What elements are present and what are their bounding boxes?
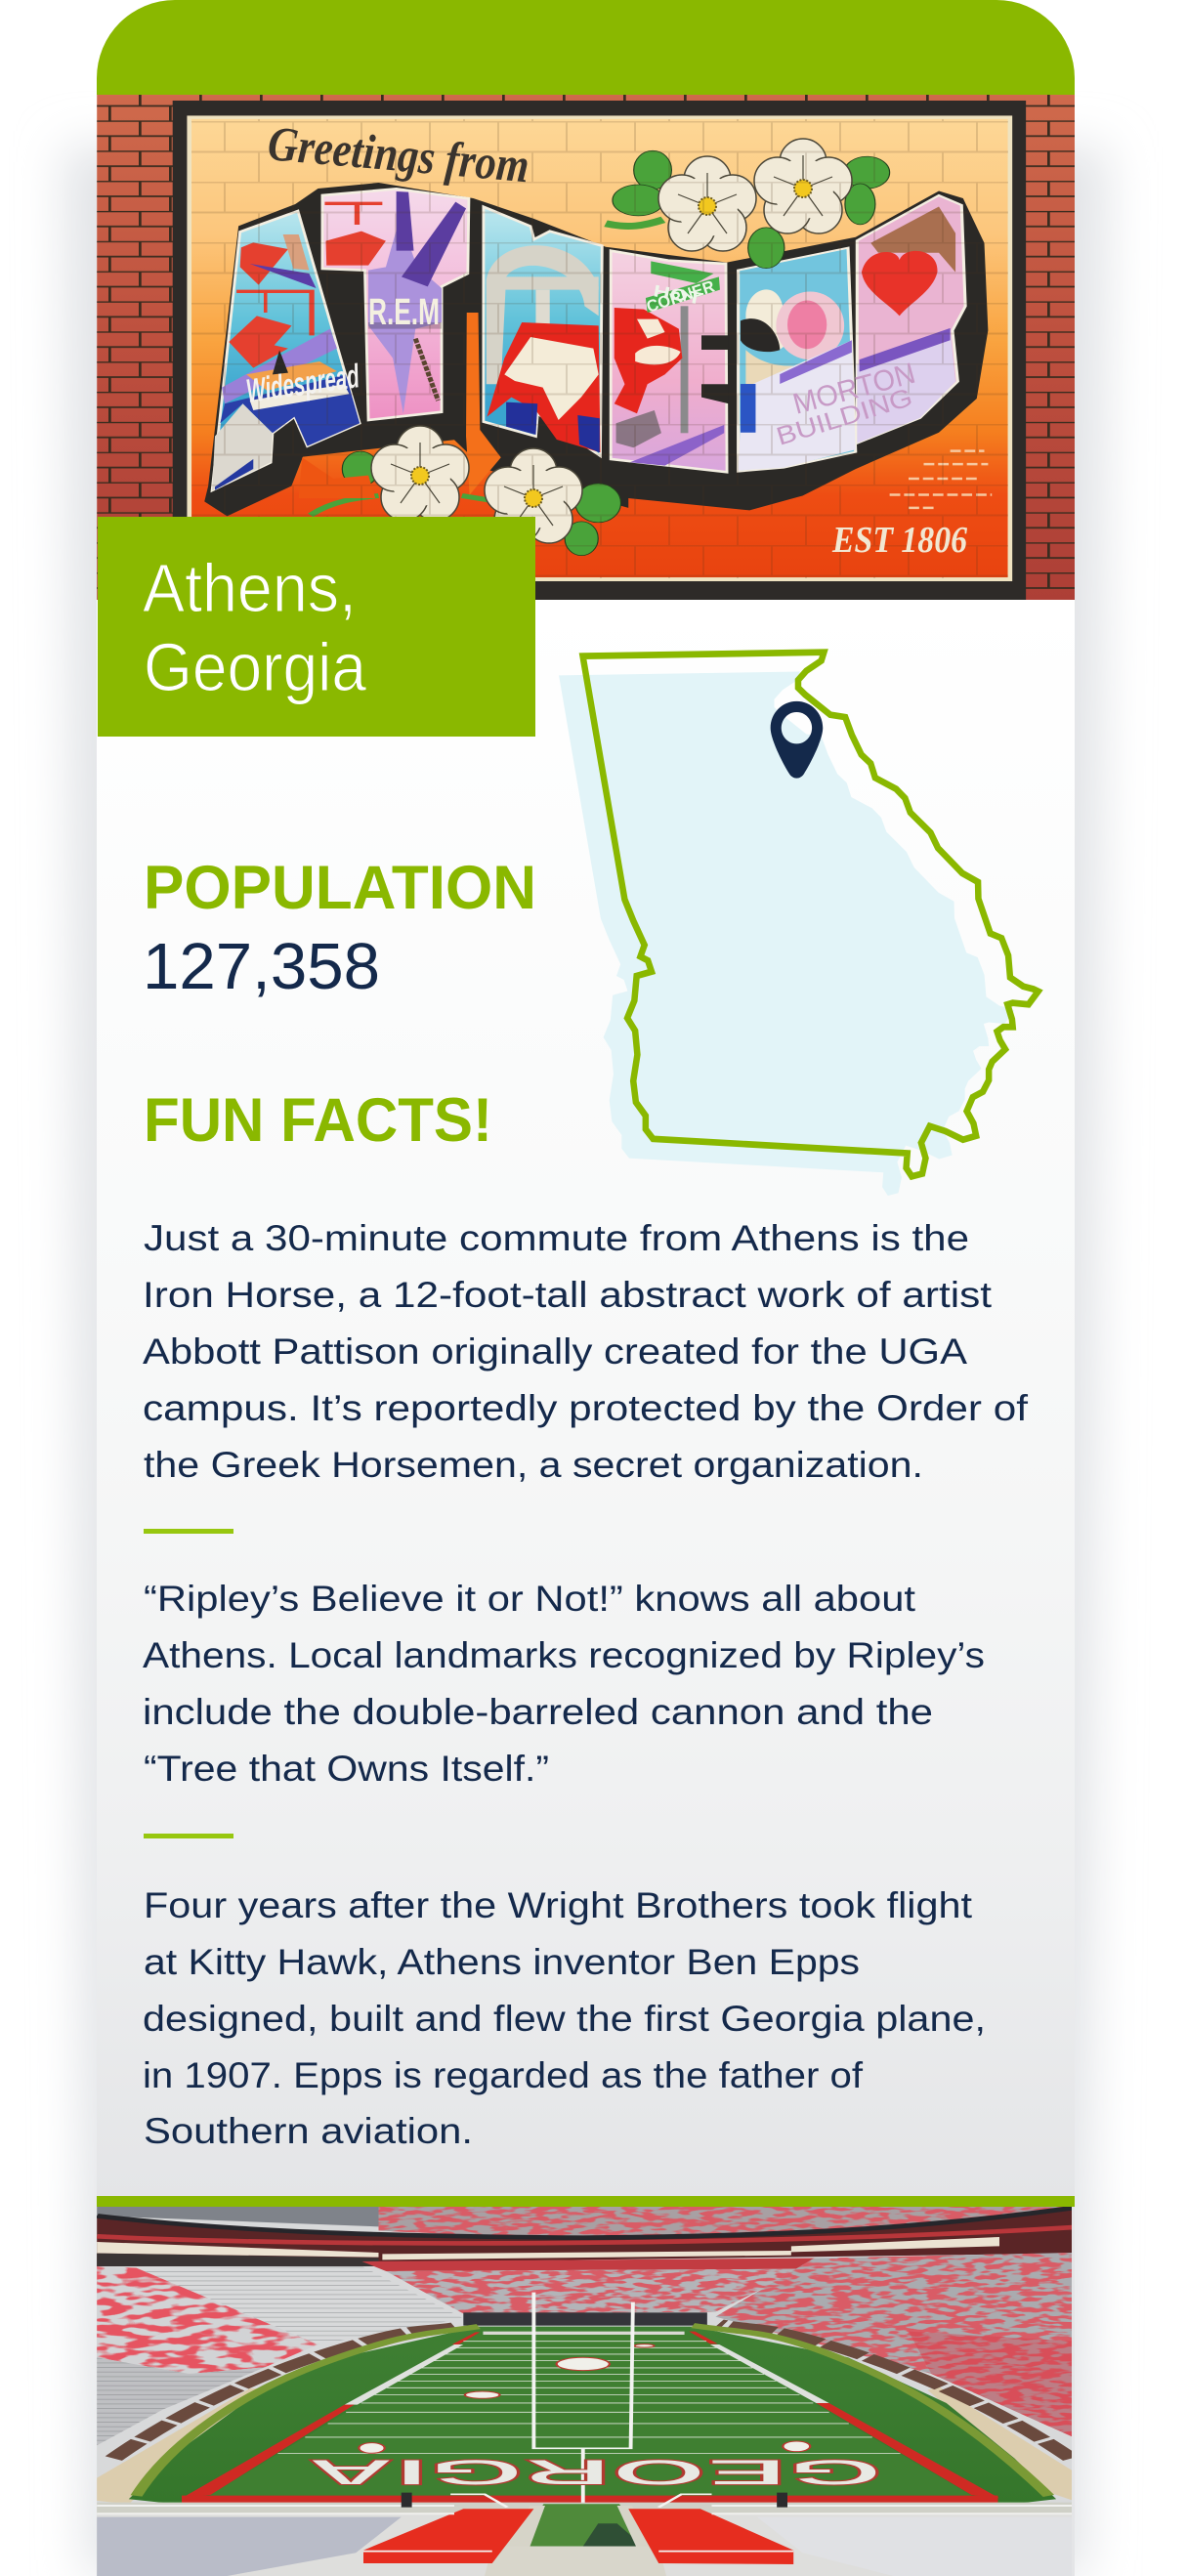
letter H bbox=[484, 207, 602, 456]
mural lettering: Widespread bbox=[244, 358, 362, 410]
midfield logos bbox=[359, 2344, 810, 2453]
red seats bbox=[363, 2509, 533, 2563]
orange gaps bbox=[466, 313, 501, 495]
lower bowl bbox=[97, 2504, 1074, 2576]
upper deck bbox=[97, 2207, 394, 2227]
fact: Ben Epps: at Kitty Hawk, Athens inventor Ben Epps bbox=[144, 1942, 860, 1982]
hedges bbox=[137, 2327, 479, 2496]
stadium artwork bbox=[97, 2207, 1075, 2576]
fact: Ripley's: “Tree that Owns Itself.” bbox=[144, 1749, 549, 1789]
letter S bbox=[857, 195, 965, 443]
card background bbox=[97, 95, 1075, 2576]
fact: Iron Horse bbox=[143, 1218, 1029, 1485]
fact: Ben Epps: designed, built and flew the first Georgia plane, bbox=[143, 1999, 986, 2039]
fact: Ripley's: “Ripley’s Believe it or Not!” knows all about bbox=[144, 1579, 916, 1619]
centre tunnel bbox=[515, 2504, 651, 2547]
railings bbox=[97, 2506, 1074, 2513]
fact: Iron Horse: Abbott Pattison originally created for the UGA bbox=[143, 1331, 967, 1372]
mural lettering: CORNER bbox=[644, 276, 717, 317]
letter A bbox=[212, 211, 360, 490]
fact: Ripley's: Athens. Local landmarks recognized by Ripley’s bbox=[143, 1635, 985, 1675]
mural wall and right-hand letters bbox=[97, 95, 1075, 600]
letter shadow bbox=[204, 183, 988, 516]
title text: Georgia bbox=[144, 629, 366, 705]
sideline bands bbox=[345, 2344, 463, 2405]
mural lettering: Greetings from bbox=[266, 115, 531, 192]
photo: Athens mural bbox=[97, 95, 1075, 600]
yard lines bbox=[277, 2342, 900, 2454]
field bbox=[208, 2333, 973, 2496]
fact: Ben Epps: in 1907. Epps is regarded as the father of bbox=[143, 2055, 864, 2095]
map outline bbox=[583, 653, 1039, 1176]
population figure: 127,358 bbox=[143, 930, 380, 1003]
letters A T H E bbox=[212, 189, 729, 498]
heading: fun facts: FUN FACTS! bbox=[144, 1086, 492, 1155]
mural flowers bbox=[371, 139, 852, 543]
signature scribbles bbox=[890, 451, 992, 508]
mural lettering: EST 1806 bbox=[831, 520, 967, 561]
right stands bbox=[715, 2253, 1074, 2437]
letter N bbox=[739, 248, 856, 472]
painted end-zone wordmark: GEORGIA bbox=[307, 2452, 882, 2492]
icon: location pin bbox=[771, 701, 823, 779]
mortar overlay bbox=[191, 119, 1008, 578]
goalpost bbox=[533, 2293, 633, 2504]
end-zone lettering bbox=[483, 2332, 685, 2335]
walkways bbox=[97, 2388, 261, 2504]
left stands bbox=[97, 2266, 361, 2267]
fact: Ben Epps: Southern aviation. bbox=[144, 2111, 473, 2151]
green header bar bbox=[97, 0, 1075, 95]
fact: Ben Epps: Four years after the Wright Brothers took flight bbox=[144, 1885, 973, 1925]
letter E bbox=[611, 251, 729, 472]
fact: Ben Epps bbox=[143, 1885, 986, 2151]
fact: Ripley's: include the double-barreled cannon and the bbox=[143, 1692, 933, 1732]
title text: Athens, bbox=[143, 550, 357, 626]
title block: Athens, Georgia bbox=[98, 517, 535, 737]
map fill bbox=[559, 671, 1014, 1196]
map of Georgia with Athens pin bbox=[559, 653, 1039, 1196]
fact: Iron Horse: Just a 30-minute commute from Athens is the bbox=[144, 1218, 969, 1258]
fact: Iron Horse: campus. It’s reportedly protected by the Order of bbox=[143, 1388, 1029, 1428]
centre stands bbox=[361, 2259, 814, 2271]
heading: population: POPULATION bbox=[144, 854, 536, 922]
mural lettering: R.E.M bbox=[368, 292, 440, 333]
mural lettering: BUILDING bbox=[773, 382, 915, 451]
mural lettering: HOT bbox=[652, 281, 704, 309]
stand walls bbox=[113, 2327, 454, 2459]
mural lettering: MORTON bbox=[789, 358, 918, 421]
mural lettering bbox=[244, 115, 967, 561]
fact: Ripley's bbox=[143, 1579, 985, 1789]
end-zone building bbox=[463, 2312, 707, 2326]
green divider bar bbox=[97, 2196, 1075, 2207]
fact: Iron Horse: the Greek Horsemen, a secret organization. bbox=[144, 1445, 923, 1485]
letter T bbox=[322, 189, 469, 420]
leaves bbox=[342, 150, 890, 556]
fact: Iron Horse: Iron Horse, a 12-foot-tall abstract work of artist bbox=[143, 1275, 993, 1315]
title text bbox=[143, 550, 366, 705]
photo: Sanford Stadium bbox=[97, 2207, 1075, 2576]
